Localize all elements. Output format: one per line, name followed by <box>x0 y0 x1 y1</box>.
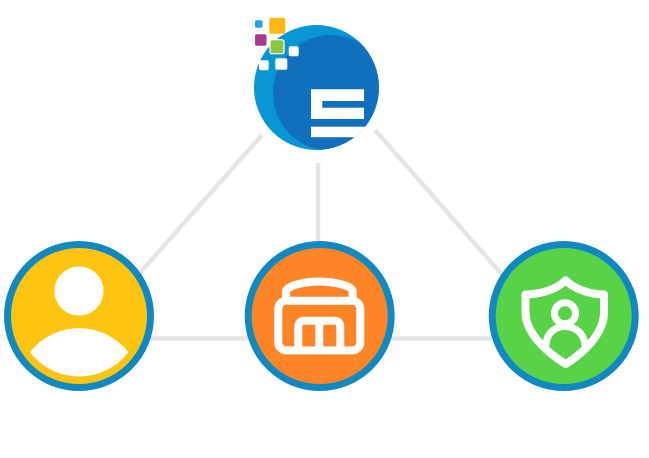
icon: company logo <box>254 18 389 151</box>
icon: shield user circle <box>492 244 635 388</box>
icon: store circle <box>248 244 391 388</box>
icon: user circle <box>8 244 150 388</box>
network diagram <box>4 18 639 391</box>
